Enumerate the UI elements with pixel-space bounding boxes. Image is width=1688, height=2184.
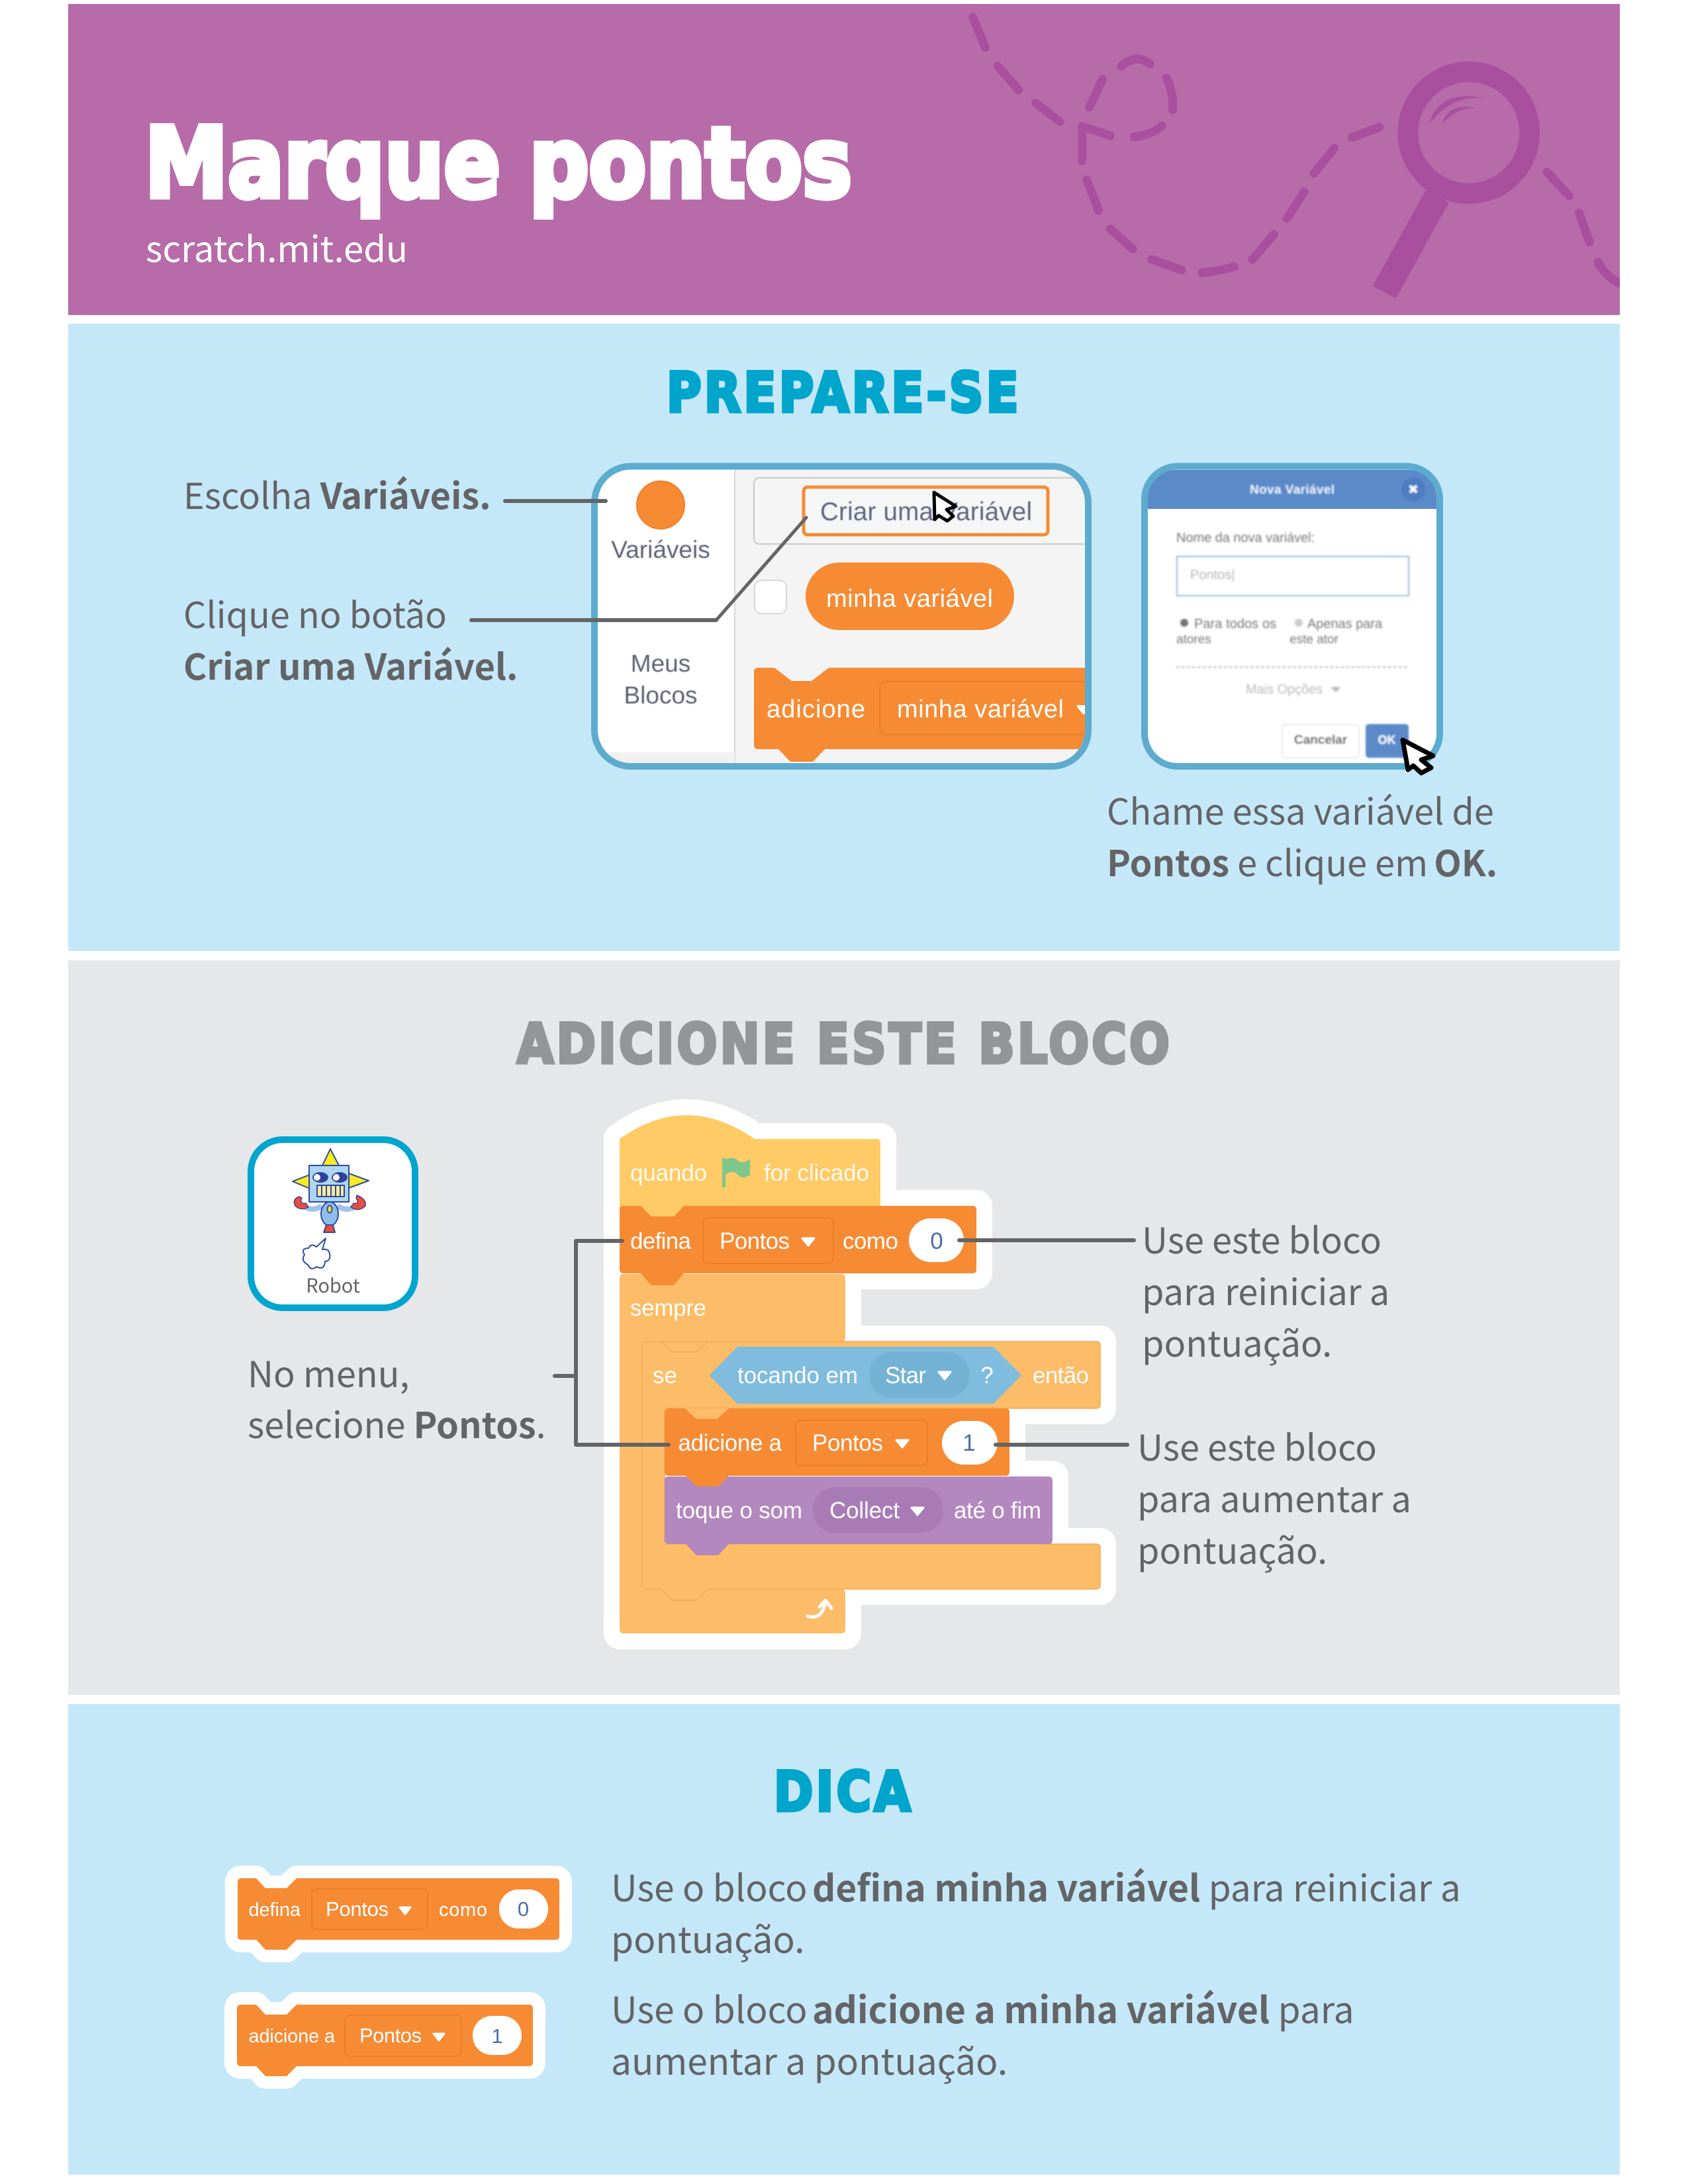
bracket line: no menu bbox=[555, 1241, 669, 1445]
white sticker outline bbox=[620, 1115, 1100, 1633]
text: clique no botao: Criar uma Variável. bbox=[183, 638, 518, 690]
block: defina tip: 0 bbox=[518, 1897, 529, 1921]
text: aumentar pontuacao: Use este bloco bbox=[1137, 1419, 1377, 1471]
leader line: reiniciar bbox=[959, 1238, 1134, 1242]
checkbox bbox=[755, 580, 786, 614]
dialog radio options: atores bbox=[1176, 633, 1211, 647]
dialog ok button bbox=[1366, 724, 1409, 758]
text: chame essa variavel: e clique em OK. bbox=[1237, 835, 1497, 887]
dialog cancel button: Cancelar bbox=[1294, 733, 1348, 747]
leader line: criar variavel bbox=[471, 518, 806, 620]
dialog title: Nova Variável bbox=[1250, 483, 1335, 497]
block: adicione bbox=[754, 668, 1118, 762]
dialog close button bbox=[1401, 477, 1425, 501]
text: no menu: selecione bbox=[248, 1396, 414, 1449]
block: adicione a pontos: Pontos bbox=[812, 1430, 883, 1456]
block: quando bandeira: quando bbox=[630, 1160, 707, 1186]
text: clique no botao: Clique no botão bbox=[183, 586, 447, 639]
block: defina pontos: como bbox=[843, 1228, 898, 1254]
text: reiniciar pontuacao: Use este bloco bbox=[1142, 1212, 1382, 1264]
block: adicione tip: Pontos bbox=[359, 2024, 422, 2047]
block: defina pontos: defina bbox=[630, 1228, 692, 1254]
heading: adicione este bloco: ADICIONE ESTE BLOCO bbox=[517, 1012, 1172, 1076]
block: defina pontos bbox=[620, 1206, 976, 1285]
label: meus blocos: Meus bbox=[631, 650, 690, 677]
leader line: aumentar bbox=[996, 1443, 1127, 1447]
dialog cancel button bbox=[1282, 725, 1359, 758]
block: adicione a pontos: adicione a bbox=[678, 1430, 782, 1456]
decoration: dashed path bbox=[973, 17, 1624, 286]
icon: robot bbox=[293, 1149, 369, 1269]
heading: prepare-se: PREPARE-SE bbox=[667, 361, 1021, 425]
dialog input: Pontos| bbox=[1190, 568, 1235, 582]
dialog radio options: Apenas para bbox=[1307, 617, 1383, 631]
block: sempre bbox=[620, 1274, 845, 1633]
sensing hexagon: tocando em bbox=[737, 1363, 858, 1388]
label: meus blocos: Blocos bbox=[624, 682, 698, 709]
sensing hexagon: ? bbox=[980, 1363, 994, 1388]
block: adicione: adicione bbox=[767, 696, 865, 723]
block: toque o som: toque o som bbox=[676, 1498, 802, 1524]
block: defina pontos: 0 bbox=[930, 1228, 943, 1254]
text: dica 1: pontuação. bbox=[611, 1911, 805, 1964]
block: sempre: sempre bbox=[630, 1295, 706, 1321]
block: toque o som: até o fim bbox=[954, 1498, 1041, 1524]
icon: cursor palette bbox=[934, 492, 956, 521]
variable pill: minha variável bbox=[826, 585, 993, 613]
sensing hexagon bbox=[710, 1347, 1021, 1404]
icon: cursor dialog bbox=[1403, 740, 1433, 773]
scratch script bbox=[620, 1115, 1100, 1633]
text: reiniciar pontuacao: pontuação. bbox=[1142, 1315, 1332, 1367]
dialog radio options: este ator bbox=[1289, 633, 1339, 647]
block: quando bandeira bbox=[620, 1115, 880, 1208]
dialog radio options bbox=[1176, 617, 1383, 647]
block: adicione tip: adicione a bbox=[249, 2026, 336, 2047]
panel: dica bbox=[68, 1704, 1620, 2175]
panel: header bbox=[68, 4, 1624, 315]
text: dica 1: Use o bloco defina minha variável para reiniciar a bbox=[611, 1859, 1461, 1912]
text: dica 2: Use o bloco adicione a minha variável para bbox=[611, 1981, 1354, 2034]
block: defina tip: como bbox=[439, 1899, 487, 1921]
icon: green flag bbox=[722, 1158, 750, 1187]
icon: variables dot bbox=[637, 481, 684, 529]
text: chame essa variavel: Pontos bbox=[1107, 835, 1229, 887]
screenshot: new variable dialog bbox=[1145, 466, 1440, 766]
button: criar uma variavel: Criar uma Variável bbox=[820, 498, 1032, 526]
dialog more options: Mais Opções bbox=[1246, 682, 1323, 697]
leader line: variaveis bbox=[505, 499, 606, 503]
title: Marque pontos bbox=[145, 107, 852, 220]
text: aumentar pontuacao: pontuação. bbox=[1137, 1522, 1327, 1574]
block: defina pontos: Pontos bbox=[720, 1228, 790, 1254]
block: defina tip: defina bbox=[249, 1899, 301, 1921]
icon: loop arrow bbox=[808, 1600, 831, 1617]
panel: adicione este bloco bbox=[68, 960, 1620, 1695]
icon: magnifying glass bbox=[1373, 71, 1530, 298]
dialog field label: Nome da nova variável: bbox=[1176, 531, 1315, 545]
text: no menu: No menu, bbox=[248, 1345, 410, 1398]
text: escolha variaveis: Escolha Variáveis. bbox=[183, 467, 491, 520]
block: se tocando: então bbox=[1033, 1363, 1089, 1388]
dialog input bbox=[1177, 557, 1409, 596]
block: adicione a pontos: 1 bbox=[962, 1430, 976, 1456]
text: no menu: Pontos. bbox=[414, 1396, 546, 1449]
button: criar uma variavel bbox=[804, 487, 1048, 535]
block: quando bandeira: for clicado bbox=[764, 1160, 869, 1186]
dialog radio options: Para todos os bbox=[1194, 617, 1276, 631]
block: adicione a pontos bbox=[665, 1408, 1009, 1486]
label: robot: Robot bbox=[306, 1271, 360, 1298]
subtitle url: scratch.mit.edu bbox=[146, 220, 408, 273]
block: se tocando bbox=[642, 1342, 1100, 1600]
block: adicione: minha variável bbox=[897, 696, 1064, 723]
heading: dica: DICA bbox=[774, 1760, 914, 1824]
block: toque o som bbox=[665, 1477, 1053, 1555]
text: aumentar pontuacao: para aumentar a bbox=[1137, 1471, 1411, 1523]
panel: prepare-se bbox=[68, 324, 1620, 951]
variable pill bbox=[806, 563, 1014, 630]
block: toque o som: Collect bbox=[829, 1498, 900, 1524]
text: chame essa variavel: Chame essa variável de bbox=[1107, 783, 1494, 835]
sprite tile: robot bbox=[251, 1140, 415, 1308]
sensing hexagon: Star bbox=[885, 1363, 926, 1388]
label: variaveis: Variáveis bbox=[611, 536, 710, 563]
block: defina tip: Pontos bbox=[326, 1897, 389, 1921]
dialog ok button: OK bbox=[1378, 733, 1396, 747]
block: defina tip bbox=[238, 1878, 559, 1950]
text: reiniciar pontuacao: para reiniciar a bbox=[1142, 1263, 1389, 1316]
block: adicione tip bbox=[237, 2005, 533, 2076]
block: se tocando: se bbox=[653, 1363, 677, 1388]
text: dica 2: aumentar a pontuação. bbox=[611, 2032, 1008, 2085]
block: adicione tip: 1 bbox=[491, 2025, 503, 2048]
screenshot: scratch palette bbox=[594, 466, 1118, 766]
